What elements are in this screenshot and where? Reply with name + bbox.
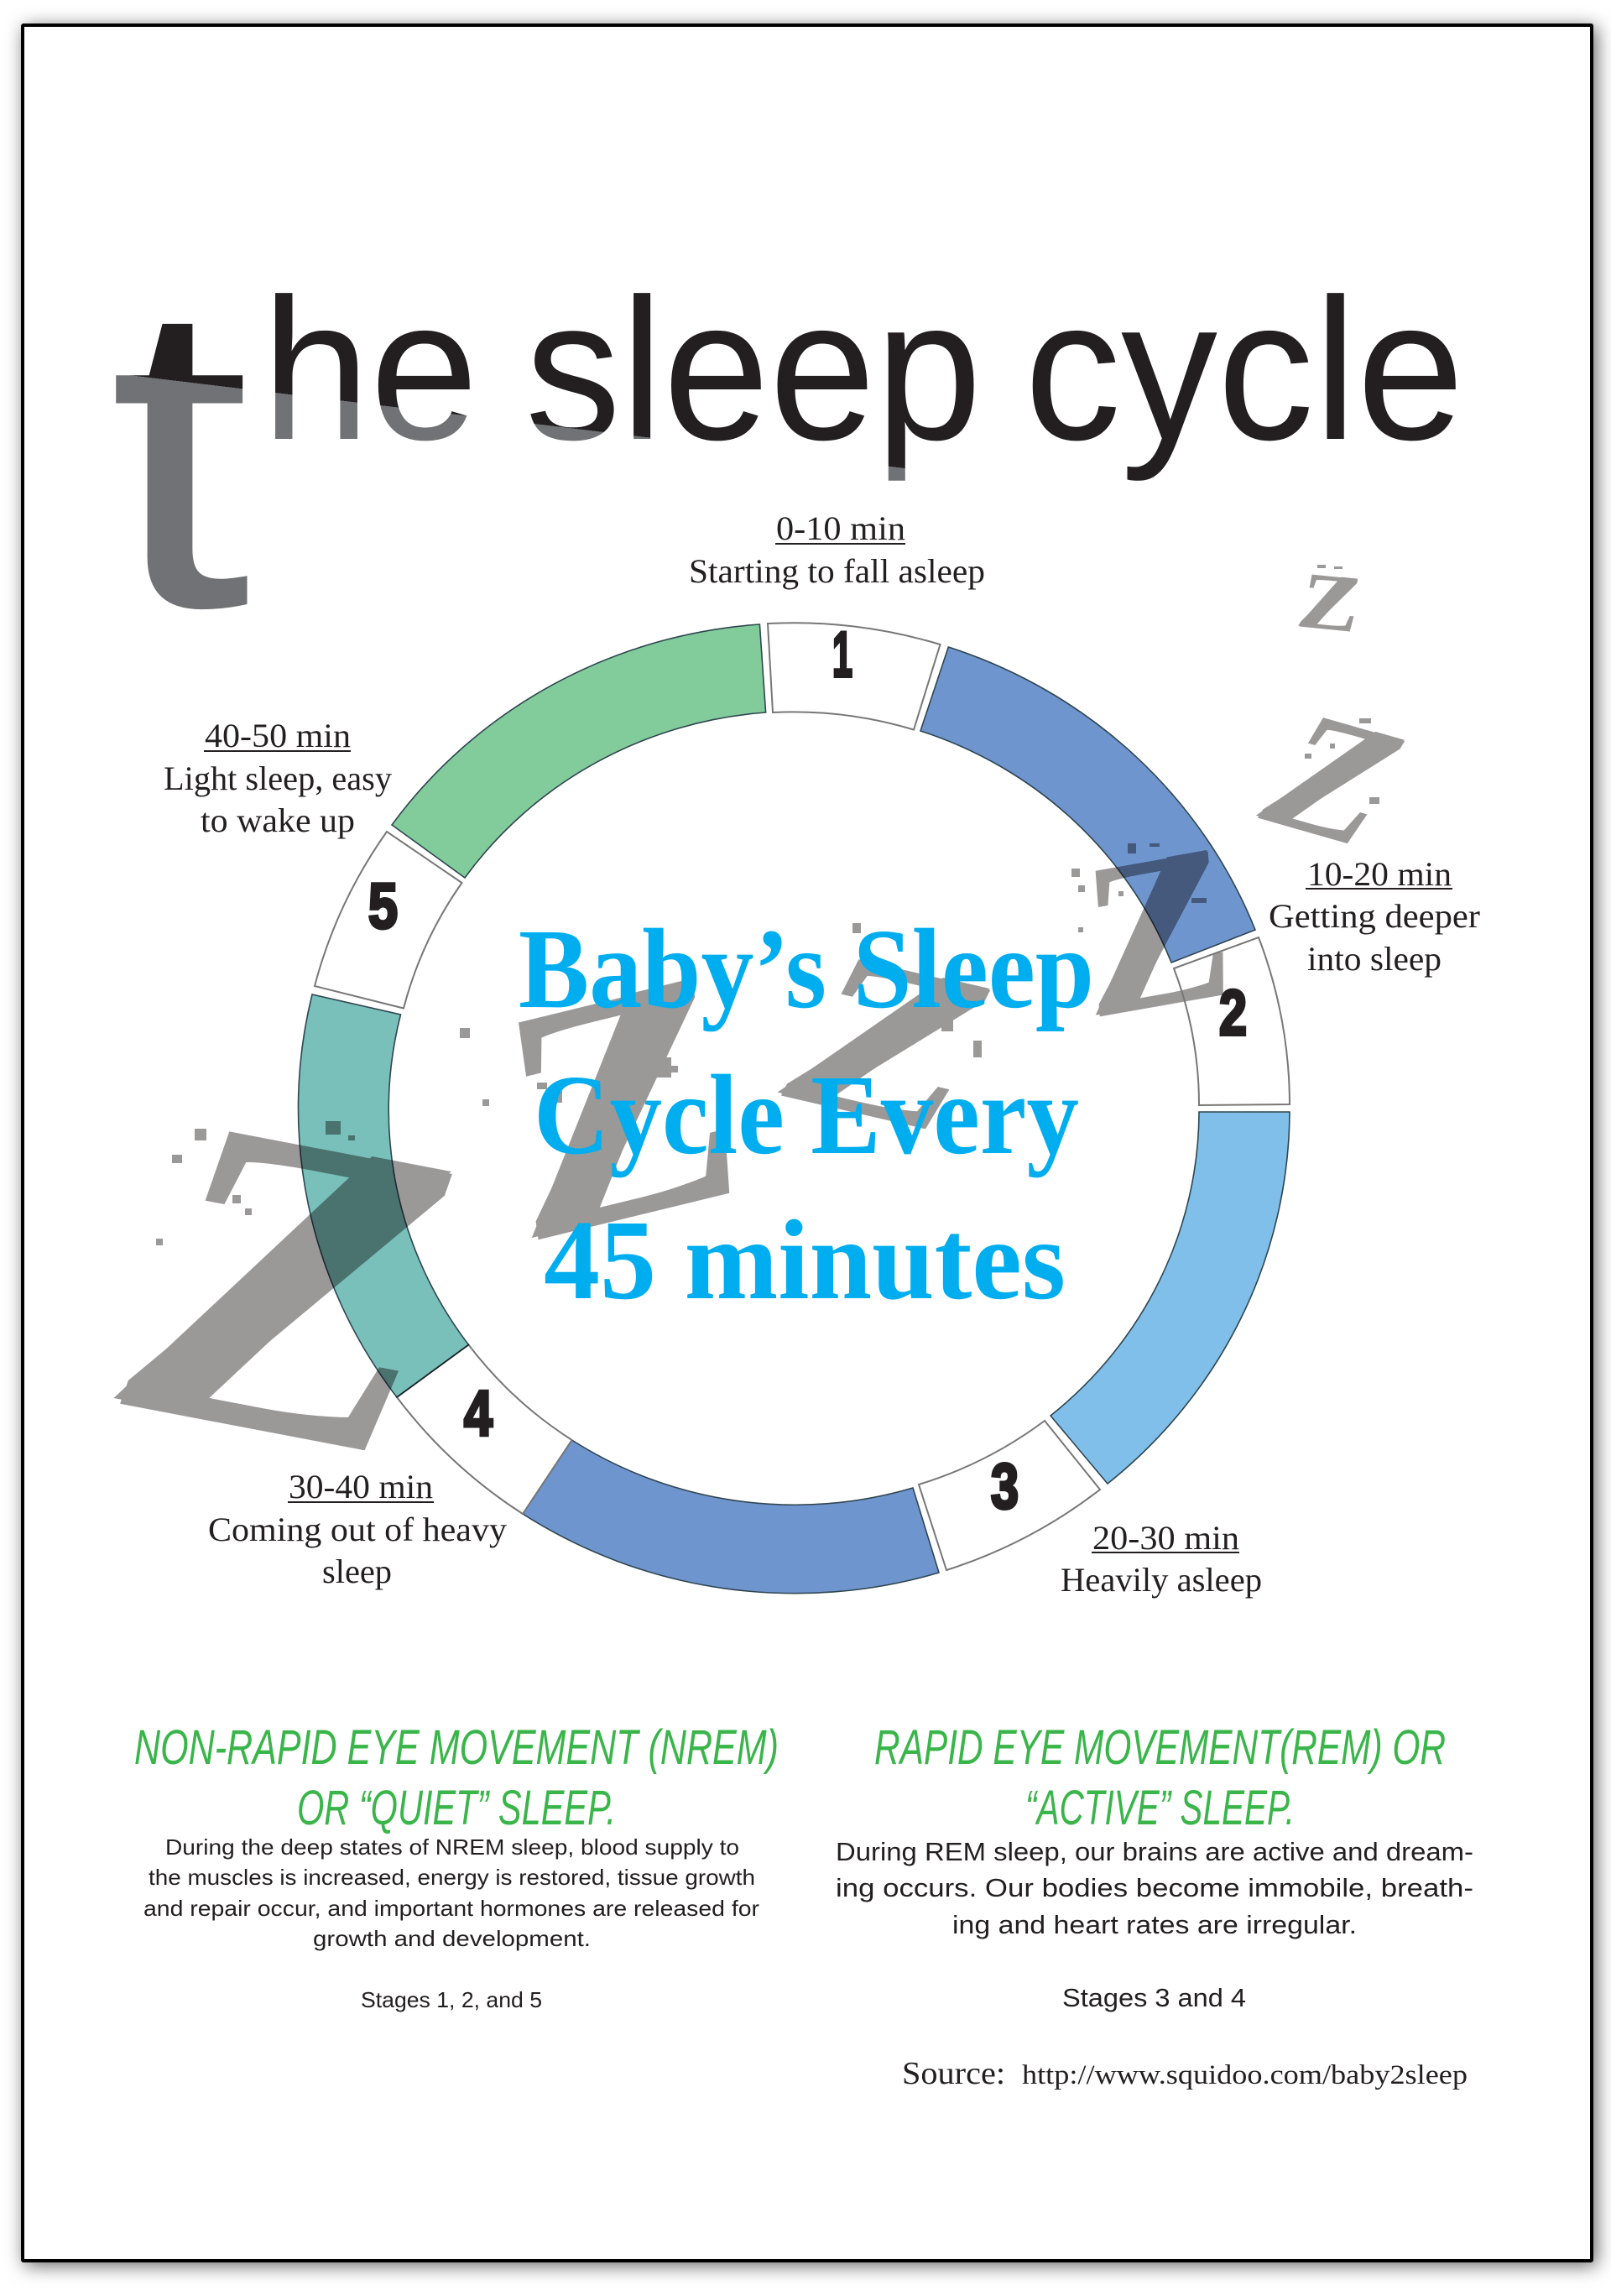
label: 10-20 min <box>1269 855 1480 978</box>
label: 10-20 min: 10-20 min <box>1307 855 1452 893</box>
text block: NREM description: and repair occur, and important hormones are released for <box>143 1896 759 1921</box>
stage numbers: 1 <box>832 619 852 691</box>
decorative Z letters: Z <box>746 905 1037 1178</box>
heading: REM <box>874 1720 1446 1835</box>
heading: REM: “ACTIVE” SLEEP. <box>1025 1781 1295 1835</box>
segment: green (stage 5 to 1) <box>392 624 766 878</box>
text block: REM description <box>836 1837 1473 2012</box>
label: 0-10 min: Starting to fall asleep <box>689 552 985 590</box>
segment: light blue (stage 2 to 3) <box>1051 1112 1290 1484</box>
source <box>902 2056 1468 2091</box>
title: the sleep cycle: sleep <box>525 257 982 482</box>
text block: REM description: During REM sleep, our brains are active and dream- <box>836 1837 1473 1866</box>
stage numbers: 3 <box>991 1451 1019 1522</box>
text block: NREM description: During the deep states of NREM sleep, blood supply to <box>165 1834 739 1860</box>
text block: NREM description <box>143 1834 759 2012</box>
stage numbers: 2 <box>1219 978 1247 1049</box>
label: 0-10 min <box>689 509 985 590</box>
decorative Z letters: Z <box>1292 556 1369 650</box>
decorative Z letters <box>67 556 1440 1547</box>
label: 20-30 min <box>1061 1519 1262 1599</box>
label: 40-50 min: Light sleep, easy <box>164 759 392 797</box>
title: the sleep cycle: cycle <box>1024 257 1464 482</box>
segment: stage 4 <box>397 1344 572 1514</box>
text block: REM description: ing and heart rates are irregular. <box>952 1910 1357 1939</box>
source: Source: <box>902 2056 1005 2091</box>
decorative Z letters: Z <box>481 896 761 1315</box>
stage numbers: 5 <box>368 871 398 942</box>
title: the sleep cycle <box>108 211 1464 699</box>
segment: blue (stage 3 to 4) <box>523 1440 939 1594</box>
label: 30-40 min <box>208 1468 507 1590</box>
text block: NREM description: Stages 1, 2, and 5 <box>361 1987 542 2012</box>
label: 10-20 min: into sleep <box>1307 940 1442 978</box>
label: 30-40 min: Coming out of heavy <box>208 1511 507 1548</box>
label: 0-10 min: 0-10 min <box>776 509 905 547</box>
center headline: 45 minutes <box>544 1198 1066 1323</box>
stage numbers <box>368 619 1247 1522</box>
segment: stage 3 <box>919 1421 1100 1570</box>
decorative Z letters: Z <box>67 1026 523 1547</box>
segment: stage 1 <box>768 623 940 730</box>
label: 40-50 min <box>164 717 392 839</box>
center headline: Cycle Every <box>534 1052 1079 1178</box>
decorative Z letters: Z <box>1230 677 1440 880</box>
center headline: Baby’s Sleep <box>519 906 1094 1032</box>
stage numbers: 4 <box>464 1378 493 1449</box>
label: 10-20 min: Getting deeper <box>1269 897 1480 935</box>
center headline <box>519 906 1094 1323</box>
segment: stage 5 <box>315 832 461 1009</box>
heading: NREM <box>134 1720 779 1835</box>
label: 40-50 min: to wake up <box>201 801 355 839</box>
label: 30-40 min: 30-40 min <box>289 1468 433 1505</box>
label: 30-40 min: sleep <box>322 1552 392 1590</box>
text block: NREM description: growth and development. <box>313 1926 591 1951</box>
segment: teal (stage 4 to 5) <box>298 994 468 1397</box>
segment: stage 2 <box>1174 937 1290 1105</box>
source: http://www.squidoo.com/baby2sleep <box>1022 2060 1468 2090</box>
label: 40-50 min: 40-50 min <box>205 717 351 754</box>
sleep cycle ring <box>298 623 1290 1594</box>
heading: NREM: NON-RAPID EYE MOVEMENT (NREM) <box>134 1720 779 1775</box>
label: 20-30 min: 20-30 min <box>1092 1519 1239 1557</box>
segment: blue (stage 1 to 2) <box>920 647 1255 963</box>
label: 20-30 min: Heavily asleep <box>1061 1561 1262 1599</box>
text block: NREM description: the muscles is increased, energy is restored, tissue growth <box>149 1865 755 1890</box>
title: the sleep cycle: he <box>262 257 478 482</box>
text block: REM description: Stages 3 and 4 <box>1062 1983 1246 2012</box>
text block: REM description: ing occurs. Our bodies become immobile, breath- <box>836 1873 1473 1902</box>
title: the sleep cycle: t <box>108 211 253 699</box>
decorative Z letters: Z <box>1074 796 1241 1067</box>
heading: NREM: OR “QUIET” SLEEP. <box>297 1781 616 1835</box>
